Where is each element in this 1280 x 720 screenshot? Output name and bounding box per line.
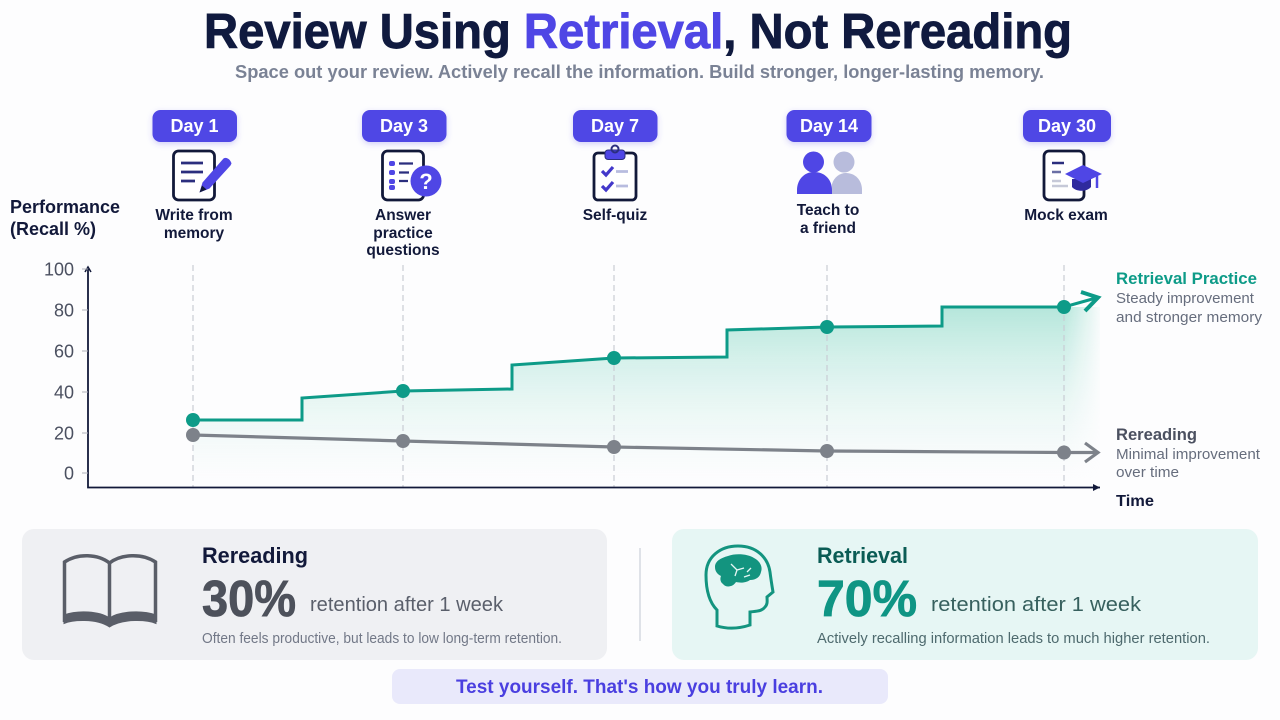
title: Review Using Retrieval, Not Rereading xyxy=(204,5,1072,59)
label: Answer practice questions: questions xyxy=(366,242,440,259)
heading: retrieval: Retrieval xyxy=(817,543,908,568)
icon: head with brain xyxy=(706,546,773,628)
stat: 70%: 70% xyxy=(817,570,917,627)
badge: Day 14: Day 14 xyxy=(800,116,858,136)
badge: Day 30: Day 30 xyxy=(1038,116,1096,136)
label: Answer practice questions: practice xyxy=(373,225,433,242)
icon: question list: ? xyxy=(419,169,433,194)
icon: clipboard checklist xyxy=(594,146,636,200)
subtitle: Space out your review. Actively recall the information. Build stronger, longer-lasting memory. xyxy=(235,62,1044,82)
label: Teach to a friend: a friend xyxy=(800,220,856,237)
callout: takeaway: Test yourself. That's how you truly learn. xyxy=(456,677,823,698)
legend: rereading: over time xyxy=(1116,464,1179,481)
chart: performance over time xyxy=(44,260,1100,491)
icon: two people xyxy=(797,152,862,194)
badge: Day 1: Day 1 xyxy=(170,116,219,136)
x-axis title: Time xyxy=(1116,493,1154,510)
divider xyxy=(639,548,641,641)
description: Often feels productive, but leads to low long-term retention. xyxy=(202,631,562,647)
badge: Day 3: Day 3 xyxy=(380,116,428,136)
label: Teach to a friend: Teach to xyxy=(797,202,859,219)
legend: rereading xyxy=(1116,426,1261,481)
y-axis tick labels: 40 xyxy=(54,382,74,402)
panel: retrieval xyxy=(672,529,1258,660)
label: Write from memory: memory xyxy=(164,225,225,242)
label: Write from memory: Write from xyxy=(155,207,233,224)
line: retrieval practice xyxy=(186,292,1098,427)
badge: Day 7: Day 7 xyxy=(591,116,639,136)
heading: rereading: Rereading xyxy=(202,543,308,568)
label: Answer practice questions: Answer xyxy=(375,207,431,224)
y-axis tick labels xyxy=(44,260,74,484)
panel: rereading xyxy=(22,529,607,660)
legend: rereading: Minimal improvement xyxy=(1116,446,1261,463)
legend: retrieval practice xyxy=(1116,270,1263,326)
description: Actively recalling information leads to much higher retention. xyxy=(817,631,1210,647)
timeline: Day 14 xyxy=(786,110,872,237)
legend: retrieval practice: Steady improvement xyxy=(1116,290,1255,307)
timeline: Day 3 xyxy=(362,110,446,259)
icon: exam and graduation cap xyxy=(1044,151,1102,200)
icon: document and pencil xyxy=(174,151,232,200)
y-axis title: (Recall %) xyxy=(10,219,96,239)
y-axis tick labels: 0 xyxy=(64,464,74,484)
legend: rereading: Rereading xyxy=(1116,426,1197,444)
stat caption: retention after 1 week xyxy=(310,594,504,616)
icon: question list xyxy=(382,151,442,200)
y-axis tick labels: 100 xyxy=(44,260,74,280)
y-axis tick labels: 20 xyxy=(54,424,74,444)
timeline: Day 7 xyxy=(573,110,658,224)
label: Self-quiz: Self-quiz xyxy=(583,207,648,224)
legend: retrieval practice: Retrieval Practice xyxy=(1116,270,1257,288)
legend: retrieval practice: and stronger memory xyxy=(1116,309,1263,326)
icon: open book xyxy=(64,556,156,627)
label: Mock exam: Mock exam xyxy=(1024,207,1108,224)
timeline: Day 1 xyxy=(152,110,237,242)
axes xyxy=(82,267,1100,491)
callout: takeaway xyxy=(392,669,888,704)
stat: 30%: 30% xyxy=(202,570,296,627)
y-axis title: Performance xyxy=(10,197,120,217)
y-axis tick labels: 80 xyxy=(54,300,74,320)
timeline: Day 30 xyxy=(1023,110,1111,224)
chart area fill xyxy=(193,307,1098,444)
line: rereading xyxy=(186,428,1098,462)
badge: Day 3 xyxy=(362,110,446,142)
y-axis tick labels: 60 xyxy=(54,342,74,362)
stat caption: retention after 1 week xyxy=(931,594,1142,616)
